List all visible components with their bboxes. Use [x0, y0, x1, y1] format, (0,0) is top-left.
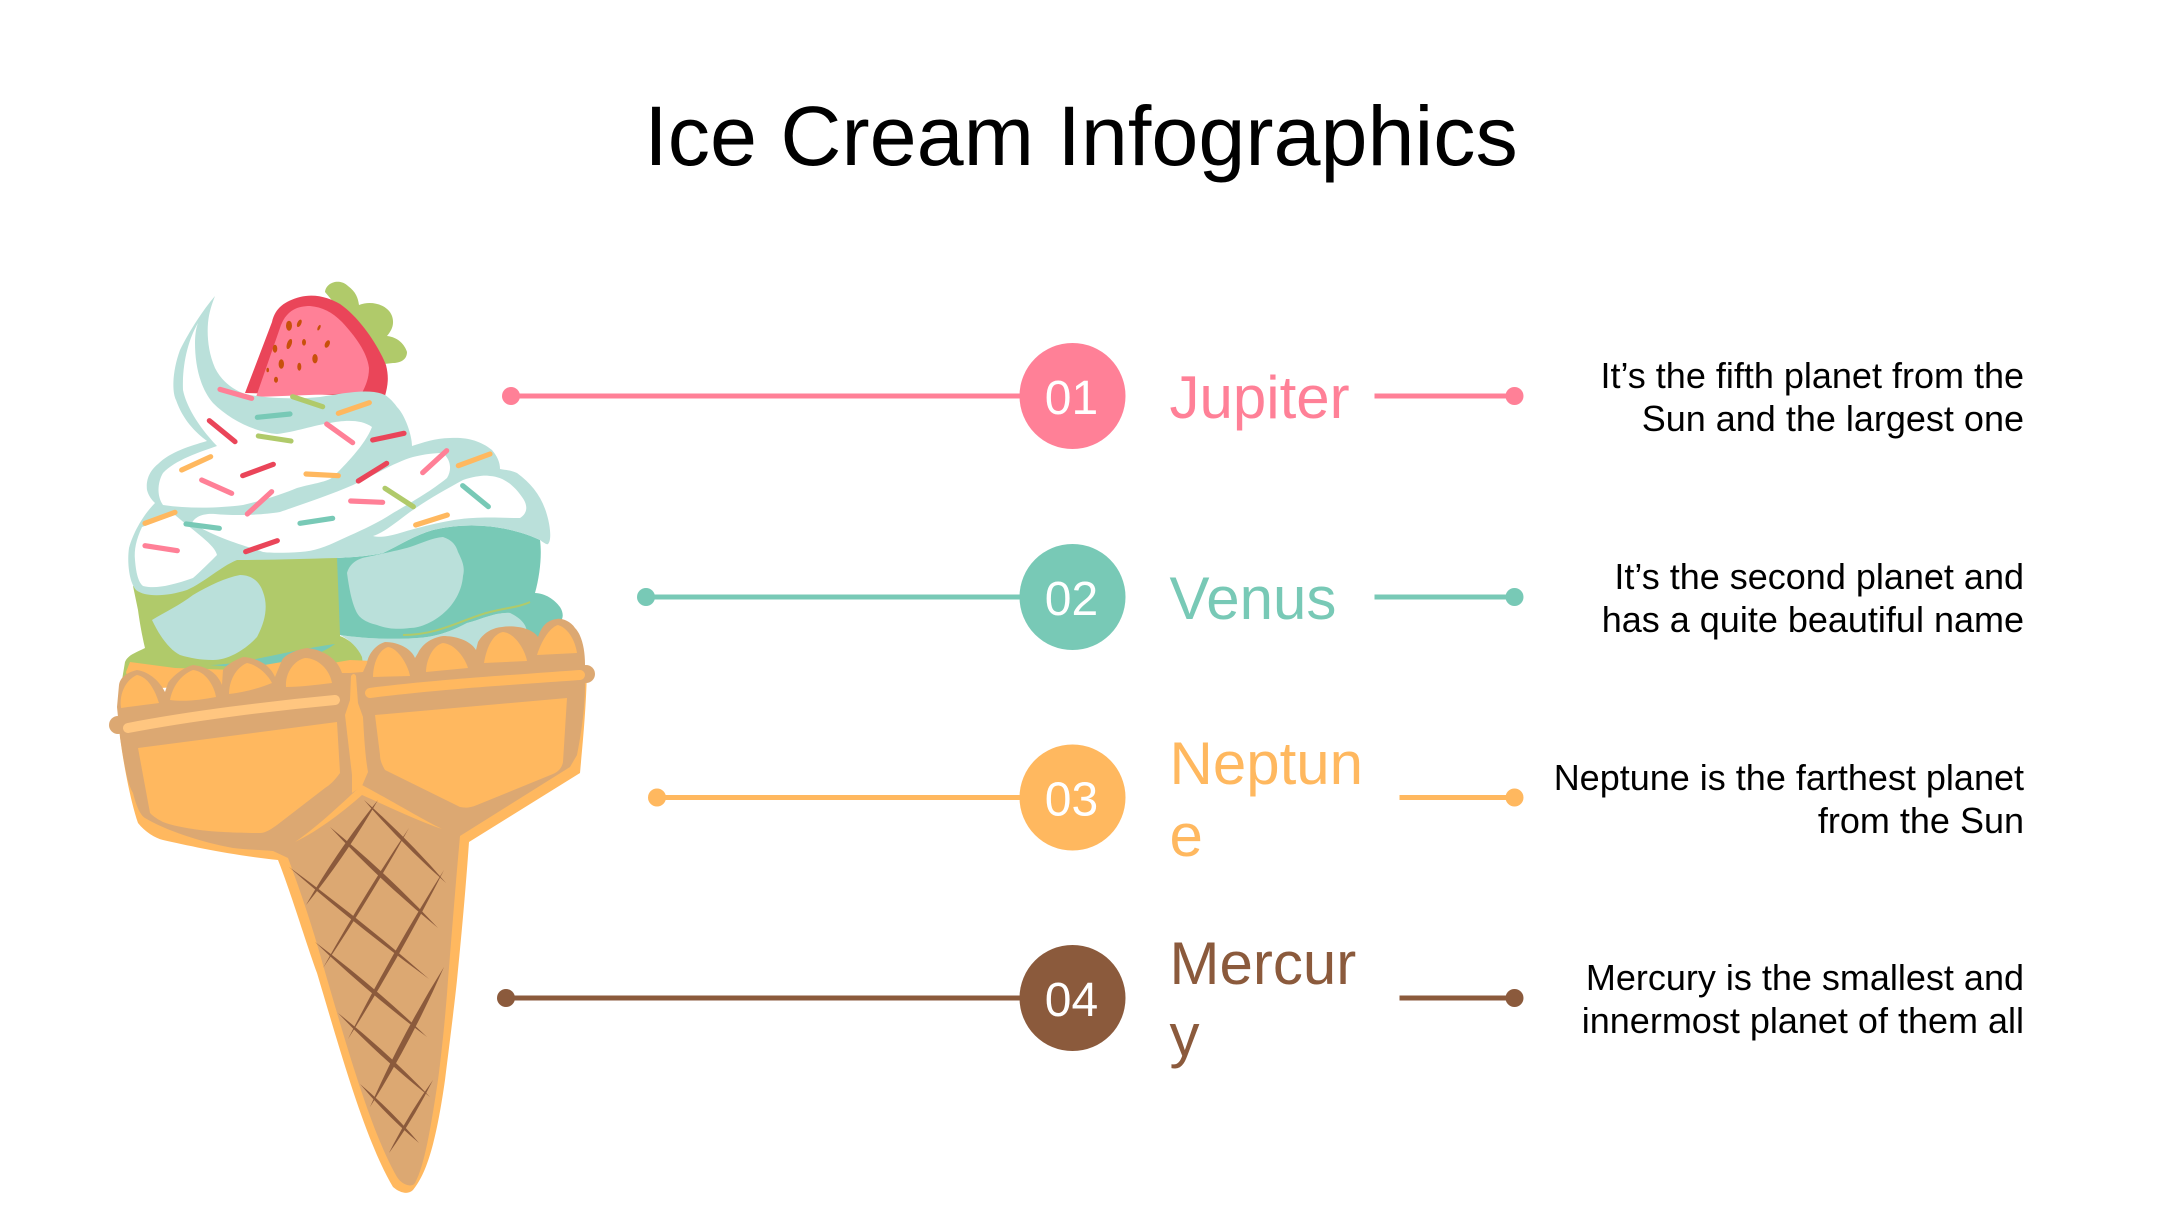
right connector — [1400, 989, 1524, 1007]
green scoop — [122, 555, 365, 680]
waffle lines — [289, 800, 446, 1153]
sprinkles — [145, 389, 490, 552]
planet name: Venus — [1170, 565, 1336, 632]
description: Sun and the largest one — [1642, 398, 2024, 439]
teal scoop — [337, 525, 563, 680]
row 01: Jupiter — [502, 343, 2024, 449]
illustration: ice cream cone — [109, 282, 595, 1193]
description: from the Sun — [1818, 800, 2024, 841]
planet name: Neptun — [1170, 730, 1363, 797]
description: Mercury is the smallest and — [1586, 957, 2024, 998]
number badge 01: 01 — [1045, 372, 1098, 425]
orange base behind left scallops — [126, 662, 285, 690]
band tips — [109, 716, 127, 734]
title: Ice Cream Infographics — [644, 89, 1518, 183]
row 02: Venus — [637, 544, 2024, 650]
number badge 04 — [1020, 945, 1126, 1051]
left connector — [497, 989, 1031, 1007]
strawberry — [245, 296, 388, 397]
description: It’s the second planet and — [1614, 556, 2024, 597]
cone orange rim — [118, 660, 587, 1193]
description: has a quite beautiful name — [1602, 599, 2024, 640]
description: Neptune is the farthest planet — [1554, 757, 2024, 798]
left highlight band — [128, 700, 335, 728]
right connector — [1400, 788, 1524, 806]
planet name: y — [1170, 1002, 1200, 1069]
right connector — [1374, 387, 1524, 405]
description: It’s the fifth planet from the — [1600, 355, 2024, 396]
number badge 01 — [1020, 343, 1126, 449]
cone panels and scallops — [121, 625, 577, 842]
number badge 03: 03 — [1045, 774, 1098, 826]
whipped cream white swirls — [135, 323, 526, 587]
planet name: Mercur — [1170, 930, 1356, 997]
waffle cone — [109, 619, 595, 1193]
right connector — [1374, 588, 1524, 606]
strawberry leaves — [325, 282, 407, 365]
row 04: Mercury — [497, 930, 2024, 1069]
left connector — [648, 788, 1031, 806]
left connector — [637, 588, 1031, 606]
cone tan body — [117, 619, 585, 1185]
row 03: Neptune — [648, 730, 2024, 869]
number badge 04: 04 — [1045, 974, 1098, 1027]
number badge 02: 02 — [1045, 573, 1098, 626]
number badge 02 — [1020, 544, 1126, 650]
whipped cream outline — [128, 296, 550, 595]
planet name: Jupiter — [1170, 364, 1350, 431]
right band — [370, 675, 580, 693]
number badge 03 — [1020, 744, 1126, 850]
left connector — [502, 387, 1031, 405]
planet name: e — [1170, 802, 1203, 869]
description: innermost planet of them all — [1582, 1000, 2024, 1041]
